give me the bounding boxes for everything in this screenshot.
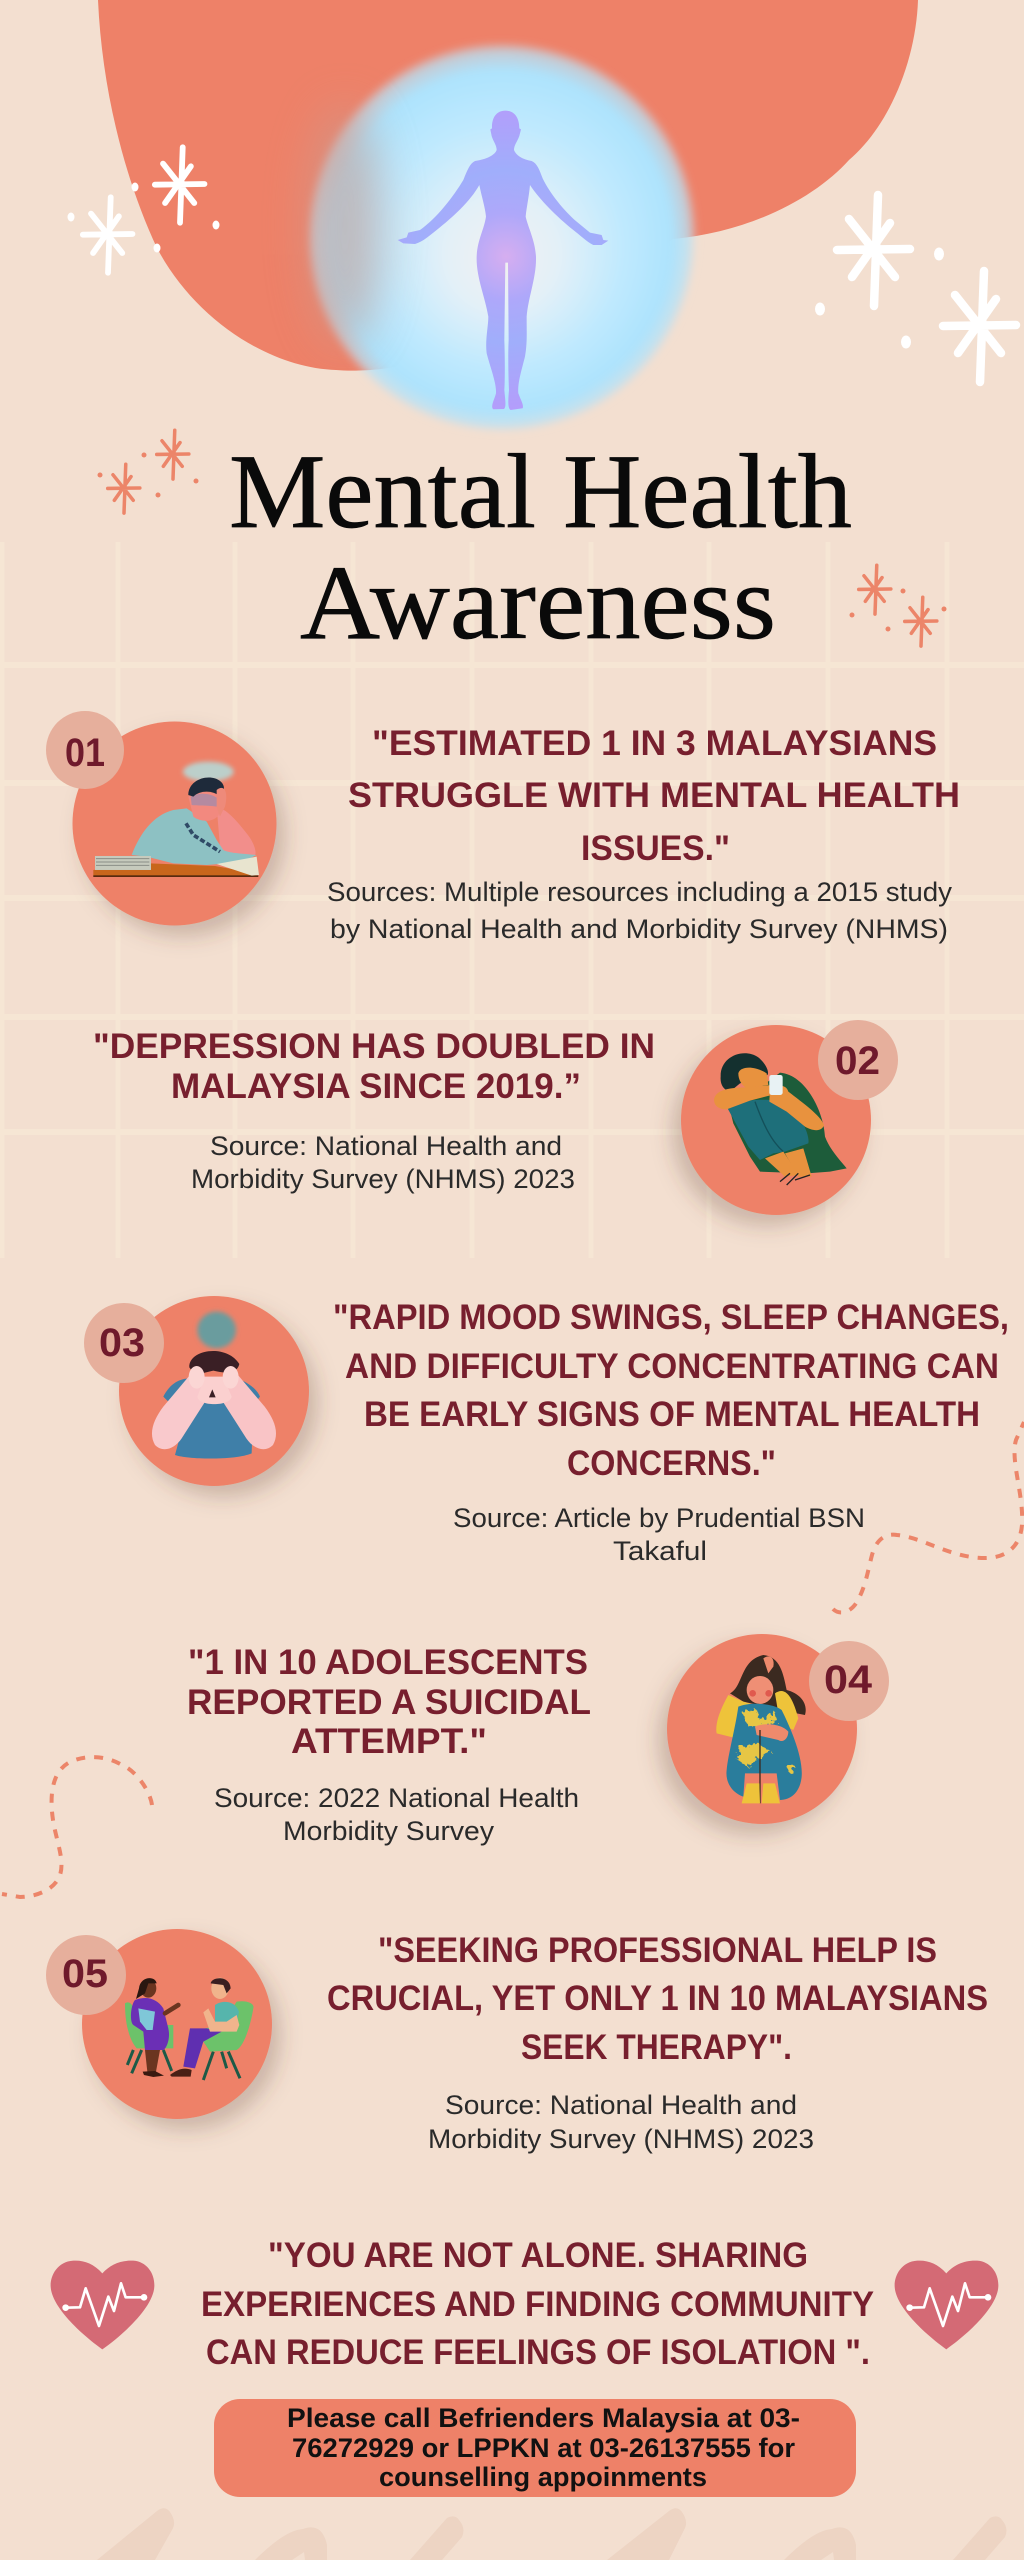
orange sparkles right of title [850, 565, 946, 646]
orange header blob [98, 0, 918, 371]
headline 04 [187, 1643, 591, 1761]
icon: heart with pulse left [51, 2261, 154, 2349]
headline 03: CONCERNS." [567, 1444, 776, 1483]
source 02 [191, 1131, 575, 1194]
headline 05 [327, 1931, 988, 2067]
source 02: Morbidity Survey (NHMS) 2023 [191, 1164, 575, 1194]
callout: helpline contacts [214, 2399, 856, 2497]
orange sparkles left of title [98, 430, 198, 513]
title: Awareness [300, 544, 776, 661]
headline 01 [348, 724, 960, 868]
number badge 02: 02 [835, 1039, 880, 1083]
number badge 02 [818, 1020, 898, 1100]
source 01: by National Health and Morbidity Survey (NHMS) [330, 914, 948, 944]
icon: human silhouette [398, 111, 608, 410]
number badge 01: 01 [65, 731, 105, 775]
source 01: Sources: Multiple resources including a 2015 study [327, 877, 953, 907]
source 04: Source: 2022 National Health [214, 1783, 579, 1813]
headline 03 [333, 1298, 1009, 1483]
illustration: girl hugging knees [667, 1634, 857, 1824]
headline 04: REPORTED A SUICIDAL [187, 1683, 591, 1722]
source 04 [214, 1783, 579, 1846]
title [229, 433, 852, 661]
illustration: man holding head [119, 1296, 309, 1486]
panel: fact 05 [46, 1929, 988, 2154]
callout: helpline contacts: Please call Befrienders Malaysia at 03- [287, 2403, 800, 2433]
source 03: Source: Article by Prudential BSN [453, 1503, 865, 1533]
illustration: therapy session [82, 1929, 272, 2119]
headline 05: "SEEKING PROFESSIONAL HELP IS [378, 1931, 937, 1970]
headline 05: SEEK THERAPY". [521, 2028, 792, 2067]
panel: fact 03 [84, 1296, 1009, 1566]
source 01 [327, 877, 953, 944]
white sparkles right [815, 195, 1016, 382]
headline 04: ATTEMPT." [291, 1722, 487, 1761]
headline 04: "1 IN 10 ADOLESCENTS [188, 1643, 588, 1682]
callout: helpline contacts: 76272929 or LPPKN at 03-26137555 for [292, 2433, 795, 2463]
glowing aura with human figure [308, 43, 696, 431]
source 05 [428, 2090, 814, 2154]
number badge 03: 03 [99, 1321, 145, 1365]
number badge 05 [46, 1935, 126, 2015]
white sparkles left [68, 147, 220, 273]
panel: fact 04 [187, 1634, 889, 1846]
source 05: Source: National Health and [445, 2090, 797, 2120]
closing message: CAN REDUCE FEELINGS OF ISOLATION ". [206, 2333, 870, 2372]
number badge 04 [809, 1641, 889, 1721]
illustration: stressed man at desk [72, 722, 276, 926]
source 02: Source: National Health and [210, 1131, 562, 1161]
source 03: Takaful [613, 1536, 707, 1566]
illustration: person curled up with phone [681, 1025, 871, 1215]
number badge 05: 05 [62, 1952, 108, 1996]
callout: helpline contacts: counselling appoinments [379, 2462, 707, 2492]
number badge 03 [84, 1303, 164, 1383]
headline 02 [93, 1027, 655, 1106]
panel: fact 02 [93, 1020, 898, 1215]
headline 05: CRUCIAL, YET ONLY 1 IN 10 MALAYSIANS [327, 1979, 988, 2018]
headline 02: "DEPRESSION HAS DOUBLED IN [93, 1027, 655, 1066]
closing message [201, 2236, 874, 2372]
panel: fact 01 [46, 711, 960, 944]
headline 01: ISSUES." [581, 829, 730, 868]
headline 02: MALAYSIA SINCE 2019.” [171, 1067, 581, 1106]
closing message: EXPERIENCES AND FINDING COMMUNITY [201, 2285, 874, 2324]
icon: heart with pulse right [895, 2261, 998, 2349]
title: Mental Health [229, 433, 852, 550]
number badge 04: 04 [824, 1658, 873, 1702]
source 03 [453, 1503, 865, 1566]
headline 01: "ESTIMATED 1 IN 3 MALAYSIANS [372, 724, 937, 763]
headline 03: AND DIFFICULTY CONCENTRATING CAN [345, 1347, 999, 1386]
headline 03: BE EARLY SIGNS OF MENTAL HEALTH [364, 1395, 980, 1434]
closing message: "YOU ARE NOT ALONE. SHARING [268, 2236, 808, 2275]
dashed curve right [833, 1422, 1024, 1612]
source 04: Morbidity Survey [283, 1816, 495, 1846]
dashed curve left [2, 1757, 152, 1897]
number badge 01 [46, 711, 124, 789]
headline 01: STRUGGLE WITH MENTAL HEALTH [348, 776, 960, 815]
source 05: Morbidity Survey (NHMS) 2023 [428, 2124, 814, 2154]
